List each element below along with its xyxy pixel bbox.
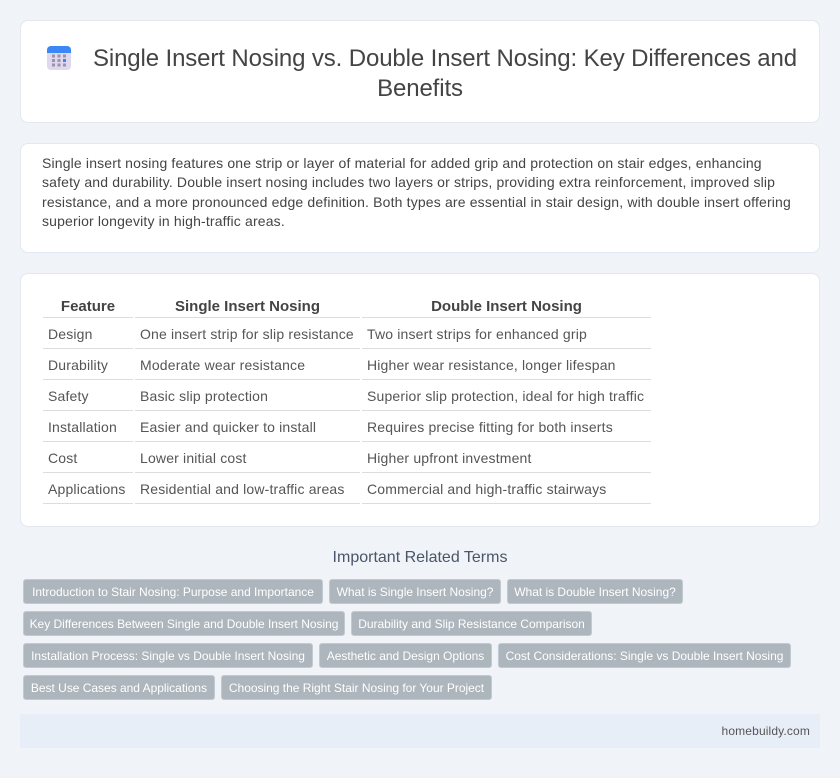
comparison table: Installation bbox=[48, 419, 117, 435]
description text bbox=[42, 155, 791, 229]
comparison table: Feature bbox=[61, 298, 115, 315]
description text: Single insert nosing features one strip or layer of material for added grip and protection on stair edges, enhancing bbox=[42, 155, 762, 171]
comparison table: Requires precise fitting for both inserts bbox=[367, 419, 613, 435]
related terms chips: Key Differences Between Single and Double Insert Nosing bbox=[30, 617, 338, 631]
related terms chips bbox=[23, 579, 791, 700]
comparison table: Cost bbox=[48, 450, 77, 466]
related terms chips: Cost Considerations: Single vs Double Insert Nosing bbox=[506, 649, 783, 663]
footer source: homebuildy.com bbox=[722, 724, 810, 738]
panel: title card bbox=[20, 20, 820, 123]
related terms chips: Aesthetic and Design Options bbox=[327, 649, 484, 663]
related terms chips: Best Use Cases and Applications bbox=[31, 681, 207, 695]
comparison table: Higher upfront investment bbox=[367, 450, 532, 466]
description text: superior longevity in high-traffic areas. bbox=[42, 213, 285, 229]
comparison table: Single Insert Nosing bbox=[175, 298, 320, 315]
comparison table: Safety bbox=[48, 388, 89, 404]
heading: related terms: Important Related Terms bbox=[333, 549, 507, 566]
title bbox=[93, 45, 797, 102]
related terms chips: What is Single Insert Nosing? bbox=[337, 585, 493, 599]
comparison table: Residential and low-traffic areas bbox=[140, 481, 345, 497]
panel: description bbox=[20, 143, 820, 253]
comparison table: Higher wear resistance, longer lifespan bbox=[367, 357, 616, 373]
description text: resistance, and a more pronounced edge definition. Both types are essential in stair design, with double insert offering bbox=[42, 194, 791, 210]
related terms chips: Introduction to Stair Nosing: Purpose and Importance bbox=[32, 585, 314, 599]
description text: safety and durability. Double insert nosing includes two layers or strips, providing extra reinforcement, improved slip bbox=[42, 174, 775, 190]
related terms chips: What is Double Insert Nosing? bbox=[514, 585, 676, 599]
comparison table: Easier and quicker to install bbox=[140, 419, 316, 435]
comparison table bbox=[43, 298, 651, 504]
comparison table: Durability bbox=[48, 357, 108, 373]
comparison table: Lower initial cost bbox=[140, 450, 247, 466]
related terms chips: Choosing the Right Stair Nosing for Your Project bbox=[229, 681, 484, 695]
title: Benefits bbox=[377, 75, 463, 102]
comparison table: Design bbox=[48, 326, 93, 342]
panel: comparison table card bbox=[20, 273, 820, 527]
footer bar bbox=[20, 714, 820, 748]
comparison table: Two insert strips for enhanced grip bbox=[367, 326, 587, 342]
comparison table: Moderate wear resistance bbox=[140, 357, 305, 373]
comparison table: Basic slip protection bbox=[140, 388, 268, 404]
related terms chips: Durability and Slip Resistance Comparison bbox=[358, 617, 585, 631]
icon: calendar bbox=[47, 46, 71, 70]
comparison table: Commercial and high-traffic stairways bbox=[367, 481, 606, 497]
comparison table: Applications bbox=[48, 481, 126, 497]
title: Single Insert Nosing vs. Double Insert Nosing: Key Differences and bbox=[93, 45, 797, 72]
comparison table: One insert strip for slip resistance bbox=[140, 326, 354, 342]
related terms chips: Installation Process: Single vs Double Insert Nosing bbox=[31, 649, 305, 663]
comparison table: Double Insert Nosing bbox=[431, 298, 582, 315]
comparison table: Superior slip protection, ideal for high traffic bbox=[367, 388, 644, 404]
